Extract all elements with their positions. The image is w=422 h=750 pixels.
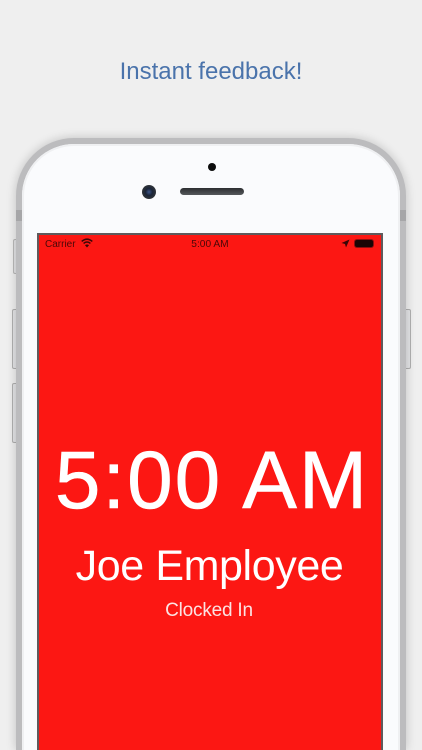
status bar xyxy=(45,238,374,250)
button: power xyxy=(405,309,411,369)
button: mute switch xyxy=(13,239,18,274)
icon: wifi xyxy=(81,238,93,248)
earpiece speaker xyxy=(180,188,244,195)
antenna band right xyxy=(400,210,406,221)
employee name: Joe Employee xyxy=(76,542,343,590)
heading: Instant feedback! xyxy=(120,58,302,85)
screen xyxy=(37,233,383,750)
icon: location arrow xyxy=(342,240,350,248)
button: volume down xyxy=(12,383,18,443)
front camera xyxy=(142,185,156,199)
icon: battery xyxy=(355,240,373,247)
inner bezel highlight xyxy=(22,144,400,750)
button: volume up xyxy=(12,309,18,369)
status time: 5:00 AM xyxy=(191,239,229,250)
phone frame xyxy=(16,138,406,750)
clock time: 5:00 AM xyxy=(55,435,369,526)
front sensor dot xyxy=(208,163,216,171)
clock status: Clocked In xyxy=(165,600,253,621)
antenna band left xyxy=(16,210,22,221)
carrier label: Carrier xyxy=(45,239,76,250)
